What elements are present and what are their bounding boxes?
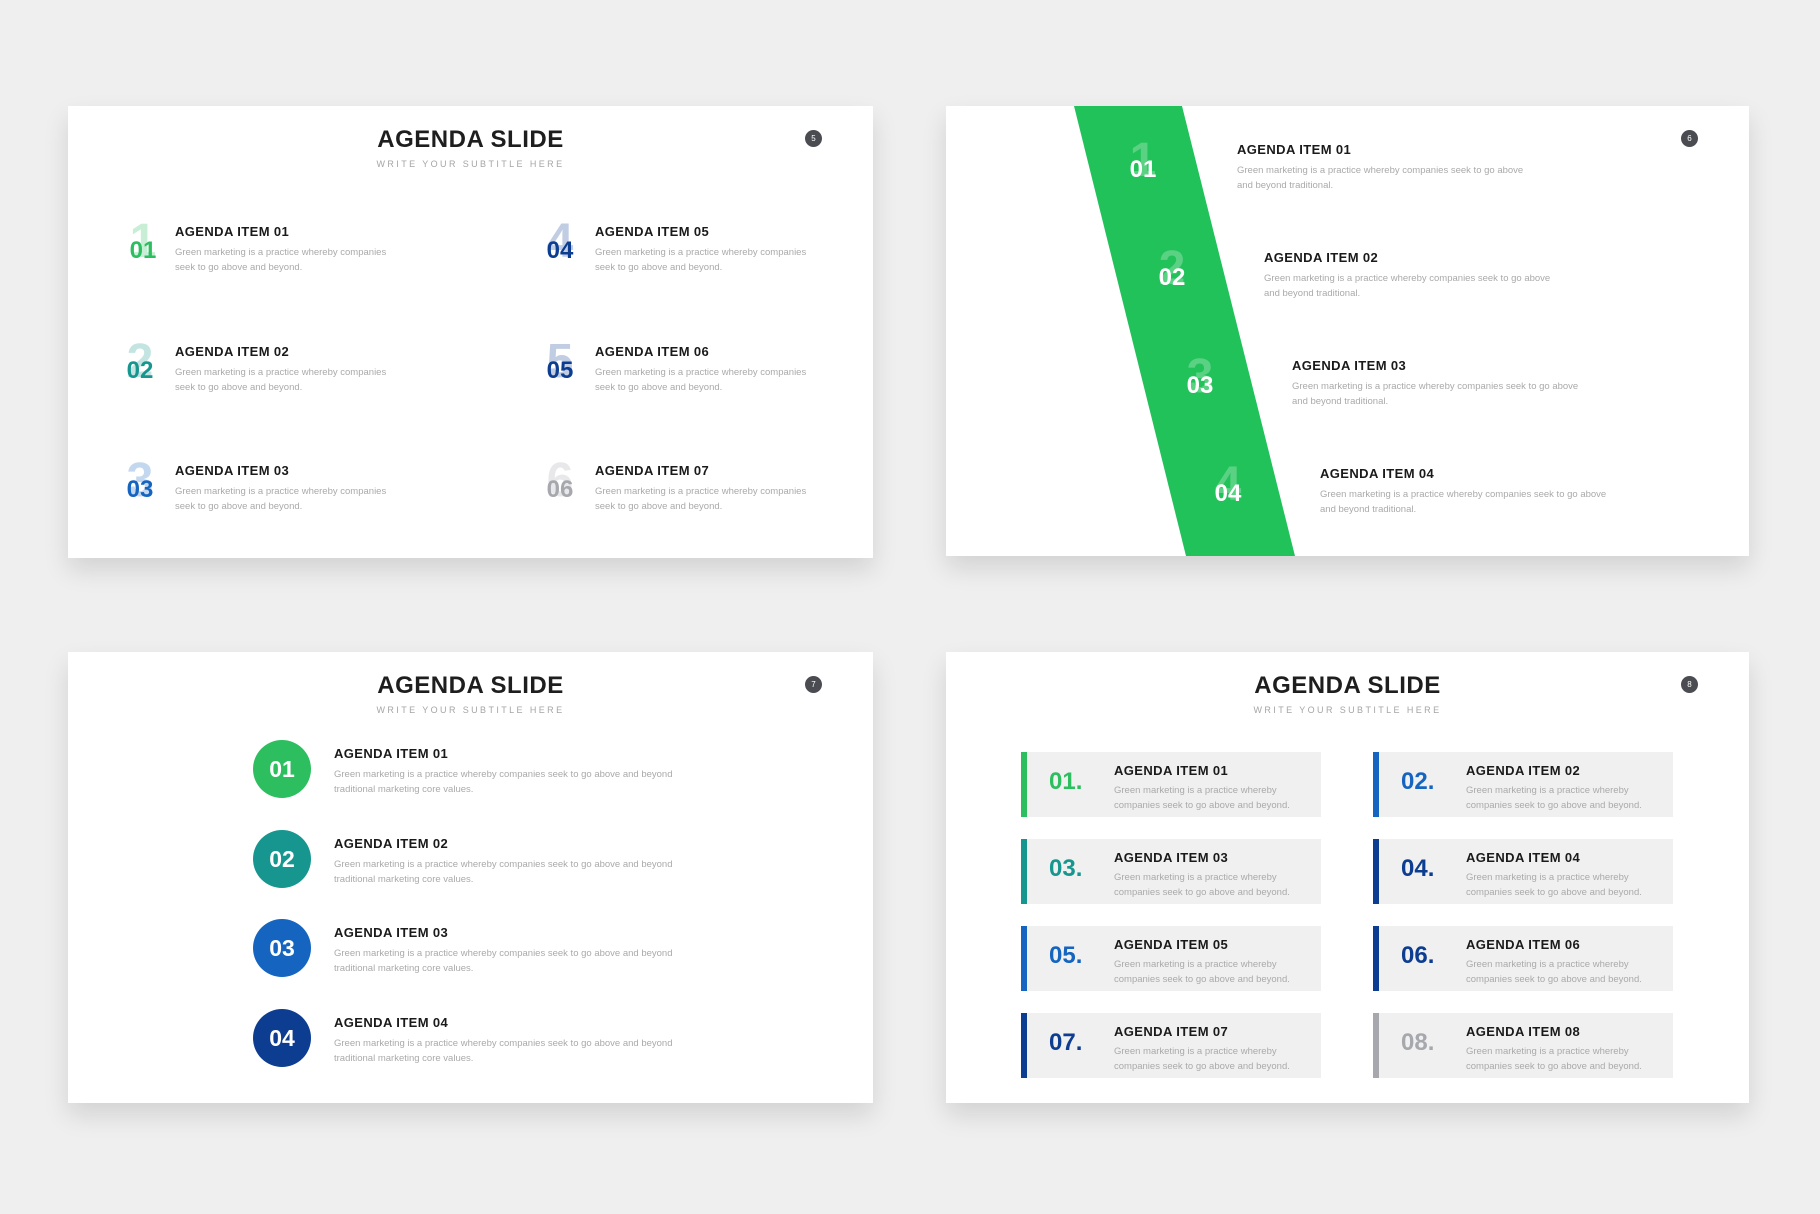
number 04: 4 [1215,458,1241,511]
item 04: AGENDA ITEM 04 [334,1015,448,1030]
page badge [1681,676,1698,693]
item 05: Green marketing is a practice whereby companies [595,247,806,258]
number 01: 1 [130,215,156,268]
card 08: AGENDA ITEM 08 [1466,1024,1580,1039]
item 03: and beyond traditional. [1292,396,1388,407]
number 06: 06 [547,476,573,503]
item 02: AGENDA ITEM 02 [1264,250,1378,265]
card 07: Green marketing is a practice whereby [1114,1046,1277,1057]
number 02: 02 [1159,264,1185,291]
item 01: AGENDA ITEM 01 [1237,142,1351,157]
panel: slide 8 [946,652,1749,1103]
page badge [805,676,822,693]
item 03: Green marketing is a practice whereby companies seek to go above [1292,381,1578,392]
item 01: traditional marketing core values. [334,784,473,795]
panel: slide 6 [946,106,1749,556]
item 04: Green marketing is a practice whereby companies seek to go above [1320,489,1606,500]
card 02: 02. [1401,768,1434,795]
number 04: 4 [547,215,573,268]
card 01: 01. [1049,768,1082,795]
card 07: 07. [1049,1029,1082,1056]
card 03: AGENDA ITEM 03 [1114,850,1228,865]
card 05: AGENDA ITEM 05 [1114,937,1228,952]
item 01 [175,224,386,273]
number 01: 01 [1130,156,1156,183]
page badge: 8 [1687,680,1692,689]
circle 01: 01 [269,756,295,782]
number 05: 5 [547,335,573,388]
card 04: companies seek to go above and beyond. [1466,887,1642,898]
panel: slide 5 [68,106,873,558]
card 02: Green marketing is a practice whereby [1466,785,1629,796]
item 02: AGENDA ITEM 02 [175,344,289,359]
card 01: Green marketing is a practice whereby [1114,785,1277,796]
card 02: AGENDA ITEM 02 [1466,763,1580,778]
subtitle: WRITE YOUR SUBTITLE HERE [377,705,564,715]
card 01: companies seek to go above and beyond. [1114,800,1290,811]
item 02: and beyond traditional. [1264,288,1360,299]
item 01: Green marketing is a practice whereby companies [175,247,386,258]
item 01 [334,746,673,795]
item 03: AGENDA ITEM 03 [175,463,289,478]
number 03: 03 [127,476,153,503]
card 05: 05. [1049,942,1082,969]
card 05: companies seek to go above and beyond. [1114,974,1290,985]
number 04: 04 [547,237,573,264]
number 04: 04 [1215,480,1241,507]
item 04 [1320,466,1606,515]
card 04: 04. [1401,855,1434,882]
card 04: Green marketing is a practice whereby [1466,872,1629,883]
subtitle: WRITE YOUR SUBTITLE HERE [377,159,564,169]
item 03 [1292,358,1578,407]
item 03 [334,925,673,974]
item 02 [334,836,673,885]
item 02: Green marketing is a practice whereby companies seek to go above and beyond [334,859,673,870]
item 03 [175,463,386,512]
item 02: traditional marketing core values. [334,874,473,885]
card 07: AGENDA ITEM 07 [1114,1024,1228,1039]
item 04: Green marketing is a practice whereby companies seek to go above and beyond [334,1038,673,1049]
card 03: 03. [1049,855,1082,882]
card 06 [1373,926,1673,991]
card 07 [1021,1013,1321,1078]
card 08: 08. [1401,1029,1434,1056]
number 02: 2 [1159,242,1185,295]
item 04 [334,1015,673,1064]
item 07: seek to go above and beyond. [595,501,722,512]
item 03: traditional marketing core values. [334,963,473,974]
item 07: AGENDA ITEM 07 [595,463,709,478]
item 07 [595,463,806,512]
circle 02: 02 [269,846,295,872]
card 02 [1373,752,1673,817]
item 02: AGENDA ITEM 02 [334,836,448,851]
card 08: Green marketing is a practice whereby [1466,1046,1629,1057]
number 06: 6 [547,454,573,507]
item 03: AGENDA ITEM 03 [1292,358,1406,373]
card 01 [1021,752,1321,817]
circle 03 [253,919,311,977]
item 01: Green marketing is a practice whereby companies seek to go above [1237,165,1523,176]
number 02: 02 [127,357,153,384]
page badge: 7 [811,680,816,689]
item 02 [175,344,386,393]
item 01: AGENDA ITEM 01 [334,746,448,761]
card 03 [1021,839,1321,904]
circle 01 [253,740,311,798]
item 06: AGENDA ITEM 06 [595,344,709,359]
card 05: Green marketing is a practice whereby [1114,959,1277,970]
item 03: AGENDA ITEM 03 [334,925,448,940]
item 05: seek to go above and beyond. [595,262,722,273]
card 06: companies seek to go above and beyond. [1466,974,1642,985]
card 04: AGENDA ITEM 04 [1466,850,1580,865]
number 01: 01 [130,237,156,264]
circle 03: 03 [269,935,295,961]
green diagonal band [1074,106,1295,556]
circle 02 [253,830,311,888]
item 03: Green marketing is a practice whereby companies seek to go above and beyond [334,948,673,959]
circle 04: 04 [269,1025,295,1051]
page badge: 6 [1687,134,1692,143]
item 02: Green marketing is a practice whereby companies seek to go above [1264,273,1550,284]
card 08 [1373,1013,1673,1078]
item 01: seek to go above and beyond. [175,262,302,273]
circle 04 [253,1009,311,1067]
card 05 [1021,926,1321,991]
item 05 [595,224,806,273]
item 06: seek to go above and beyond. [595,382,722,393]
card 03: companies seek to go above and beyond. [1114,887,1290,898]
item 06 [595,344,806,393]
number 02: 2 [127,335,153,388]
number 05: 05 [547,357,573,384]
item 02 [1264,250,1550,299]
card 03: Green marketing is a practice whereby [1114,872,1277,883]
number 03: 3 [1187,350,1213,403]
item 05: AGENDA ITEM 05 [595,224,709,239]
page badge [1681,130,1698,147]
card 06: Green marketing is a practice whereby [1466,959,1629,970]
item 07: Green marketing is a practice whereby companies [595,486,806,497]
card 01: AGENDA ITEM 01 [1114,763,1228,778]
title: AGENDA SLIDE [1254,672,1441,699]
panel: slide 7 [68,652,873,1103]
card 06: AGENDA ITEM 06 [1466,937,1580,952]
item 01: Green marketing is a practice whereby companies seek to go above and beyond [334,769,673,780]
number 03: 3 [127,454,153,507]
title: AGENDA SLIDE [377,126,564,153]
title: AGENDA SLIDE [377,672,564,699]
item 04: AGENDA ITEM 04 [1320,466,1434,481]
page badge [805,130,822,147]
item 02: seek to go above and beyond. [175,382,302,393]
item 01: AGENDA ITEM 01 [175,224,289,239]
card 08: companies seek to go above and beyond. [1466,1061,1642,1072]
card 04 [1373,839,1673,904]
card 07: companies seek to go above and beyond. [1114,1061,1290,1072]
item 04: traditional marketing core values. [334,1053,473,1064]
subtitle: WRITE YOUR SUBTITLE HERE [1254,705,1441,715]
card 02: companies seek to go above and beyond. [1466,800,1642,811]
item 06: Green marketing is a practice whereby companies [595,367,806,378]
item 02: Green marketing is a practice whereby companies [175,367,386,378]
page badge: 5 [811,134,816,143]
item 03: seek to go above and beyond. [175,501,302,512]
item 03: Green marketing is a practice whereby companies [175,486,386,497]
card 06: 06. [1401,942,1434,969]
number 03: 03 [1187,372,1213,399]
number 01: 1 [1130,134,1156,187]
item 01: and beyond traditional. [1237,180,1333,191]
item 04: and beyond traditional. [1320,504,1416,515]
item 01 [1237,142,1523,191]
